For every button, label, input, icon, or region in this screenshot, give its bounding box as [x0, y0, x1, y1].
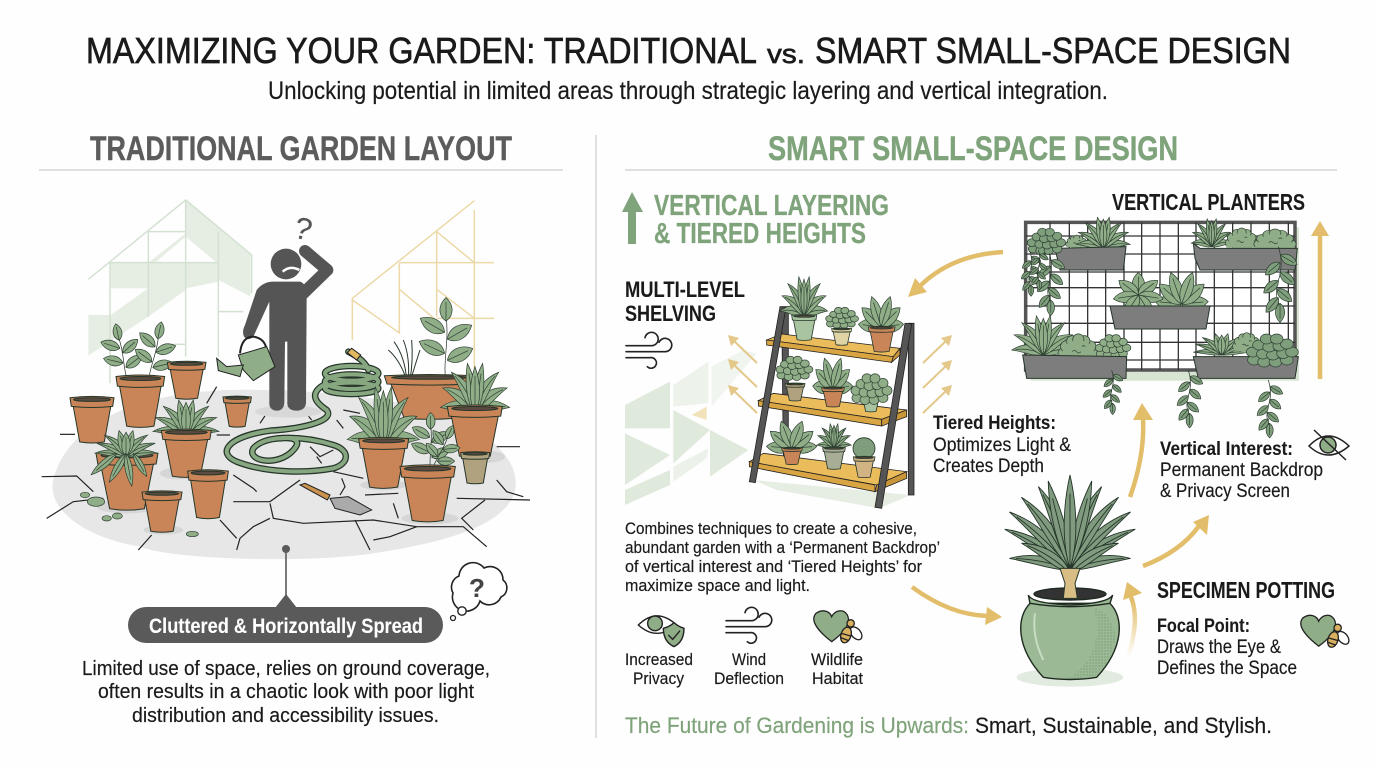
glazed pot — [1021, 588, 1119, 679]
heading: multi-level shelving — [625, 277, 745, 326]
shelf plants — [766, 276, 904, 478]
text: vertical interest — [1160, 439, 1323, 502]
text: focal point: Focal Point: — [1157, 616, 1250, 637]
footer tagline: Smart, Sustainable, and Stylish. — [975, 713, 1272, 738]
callout pill — [128, 607, 443, 643]
description: combined technique: Combines techniques to create a cohesive, — [625, 519, 917, 538]
benefit icons row — [625, 607, 864, 688]
pot trunk — [1060, 568, 1080, 598]
icon: wind small — [626, 332, 672, 368]
arrow: tall up — [1311, 221, 1329, 379]
page header — [86, 30, 1291, 105]
icon: increased privacy — [638, 616, 684, 647]
description: traditional: often results in a chaotic look with poor light — [98, 681, 474, 703]
middle shelf — [758, 393, 907, 426]
description: traditional: Limited use of space, relies on ground coverage, — [82, 658, 490, 680]
description: combined technique: abundant garden with a ‘Permanent Backdrop’ — [625, 538, 940, 557]
arrow: pot to planter — [1130, 403, 1153, 497]
title: MAXIMIZING YOUR GARDEN: TRADITIONAL — [86, 30, 757, 71]
heading: smart: SMART SMALL-SPACE DESIGN — [768, 130, 1178, 168]
text: tiered heights — [933, 413, 1071, 477]
planter bottom left — [1012, 315, 1131, 415]
heading: multi-level shelving: SHELVING — [625, 301, 716, 326]
arrow: description to pot — [912, 587, 1002, 625]
label: wind deflection: Wind — [732, 650, 766, 669]
icon: thought bubble: ? — [469, 573, 485, 603]
person scratching head — [243, 211, 327, 418]
icon: heart and bee — [1301, 615, 1351, 649]
icon: up arrow — [622, 192, 643, 244]
terracotta pots and plants — [70, 298, 510, 537]
description: traditional — [82, 658, 490, 727]
illustration: tiered shelf — [625, 276, 914, 508]
text: focal point — [1157, 616, 1297, 679]
description: combined technique: of vertical interest and ‘Tiered Heights’ for — [625, 557, 922, 576]
title — [86, 30, 1291, 71]
left greenhouse backdrop — [88, 200, 252, 383]
text: vertical interest: Permanent Backdrop — [1160, 460, 1323, 481]
title: SMART SMALL-SPACE DESIGN — [815, 30, 1291, 71]
planter top left — [1020, 217, 1130, 316]
garden hose — [227, 348, 378, 472]
description: combined technique — [625, 519, 940, 595]
callout pointer — [275, 545, 297, 608]
person scratching head: ? — [291, 211, 315, 248]
description: traditional: distribution and accessibility issues. — [132, 705, 439, 727]
heading: vertical planters: VERTICAL PLANTERS — [1112, 189, 1305, 215]
right greenhouse backdrop — [352, 201, 494, 370]
planter top right — [1191, 218, 1299, 322]
top shelf — [767, 334, 900, 362]
text: tiered heights: Creates Depth — [933, 456, 1044, 477]
arrow: pot to vertical interest — [1143, 515, 1209, 566]
shelf frame back legs — [782, 307, 914, 495]
flow arrows — [908, 221, 1329, 657]
text: vertical interest: Vertical Interest: — [1160, 439, 1293, 460]
heading: vertical layering: & TIERED HEIGHTS — [654, 218, 866, 250]
text: vertical interest: & Privacy Screen — [1160, 481, 1290, 502]
subtitle: Unlocking potential in limited areas through strategic layering and vertical integration. — [268, 77, 1108, 105]
text: tiered heights: Optimizes Light & — [933, 435, 1071, 456]
agave plant — [1005, 475, 1135, 583]
heading: traditional: TRADITIONAL GARDEN LAYOUT — [90, 130, 512, 168]
watering can — [217, 337, 275, 381]
icon: wildlife habitat — [814, 611, 864, 644]
text: focal point: Draws the Eye & — [1157, 637, 1281, 658]
title: vs. — [767, 39, 805, 69]
illustration: vertical planter wall — [1012, 217, 1299, 438]
heading: vertical layering — [654, 190, 889, 250]
light arrows around shelf — [728, 335, 952, 413]
icon: crossed eye — [1309, 430, 1349, 460]
label: wind deflection — [714, 650, 784, 688]
planter bottom right — [1175, 333, 1298, 438]
footer tagline: The Future of Gardening is Upwards: — [625, 713, 969, 738]
panel divider — [595, 135, 597, 738]
label: wildlife habitat: Habitat — [812, 669, 863, 688]
panel: traditional garden layout — [39, 130, 563, 727]
icon: thought bubble — [450, 563, 507, 620]
text: focal point: Defines the Space — [1157, 658, 1297, 679]
text: tiered heights: Tiered Heights: — [933, 413, 1056, 434]
planter center — [1110, 270, 1210, 329]
callout pill: Cluttered & Horizontally Spread — [149, 615, 423, 638]
footer tagline — [625, 713, 1272, 738]
illustration: cluttered garden — [42, 200, 530, 559]
description: combined technique: maximize space and light. — [625, 576, 810, 595]
hand trowel — [300, 483, 372, 515]
label: wind deflection: Deflection — [714, 669, 784, 688]
heading: multi-level shelving: MULTI-LEVEL — [625, 277, 745, 302]
label: increased privacy: Increased — [625, 650, 693, 669]
panel: smart small-space design — [622, 130, 1351, 738]
icon: wind deflection — [726, 607, 772, 643]
label: increased privacy — [625, 650, 693, 688]
label: increased privacy: Privacy — [633, 669, 684, 688]
label: wildlife habitat: Wildlife — [811, 650, 863, 669]
label: wildlife habitat — [811, 650, 863, 688]
pot shadow — [1017, 668, 1123, 687]
heading: vertical layering: VERTICAL LAYERING — [654, 190, 889, 222]
cracked ground — [42, 387, 530, 559]
geometric backdrop — [625, 350, 910, 508]
shelf frame front legs — [749, 307, 912, 508]
arrow: planter to shelf — [908, 252, 1003, 297]
illustration: specimen pot — [1005, 475, 1135, 687]
bottom shelf — [749, 453, 907, 492]
wire grid — [1026, 222, 1299, 381]
arrow: fading up — [1123, 582, 1142, 657]
